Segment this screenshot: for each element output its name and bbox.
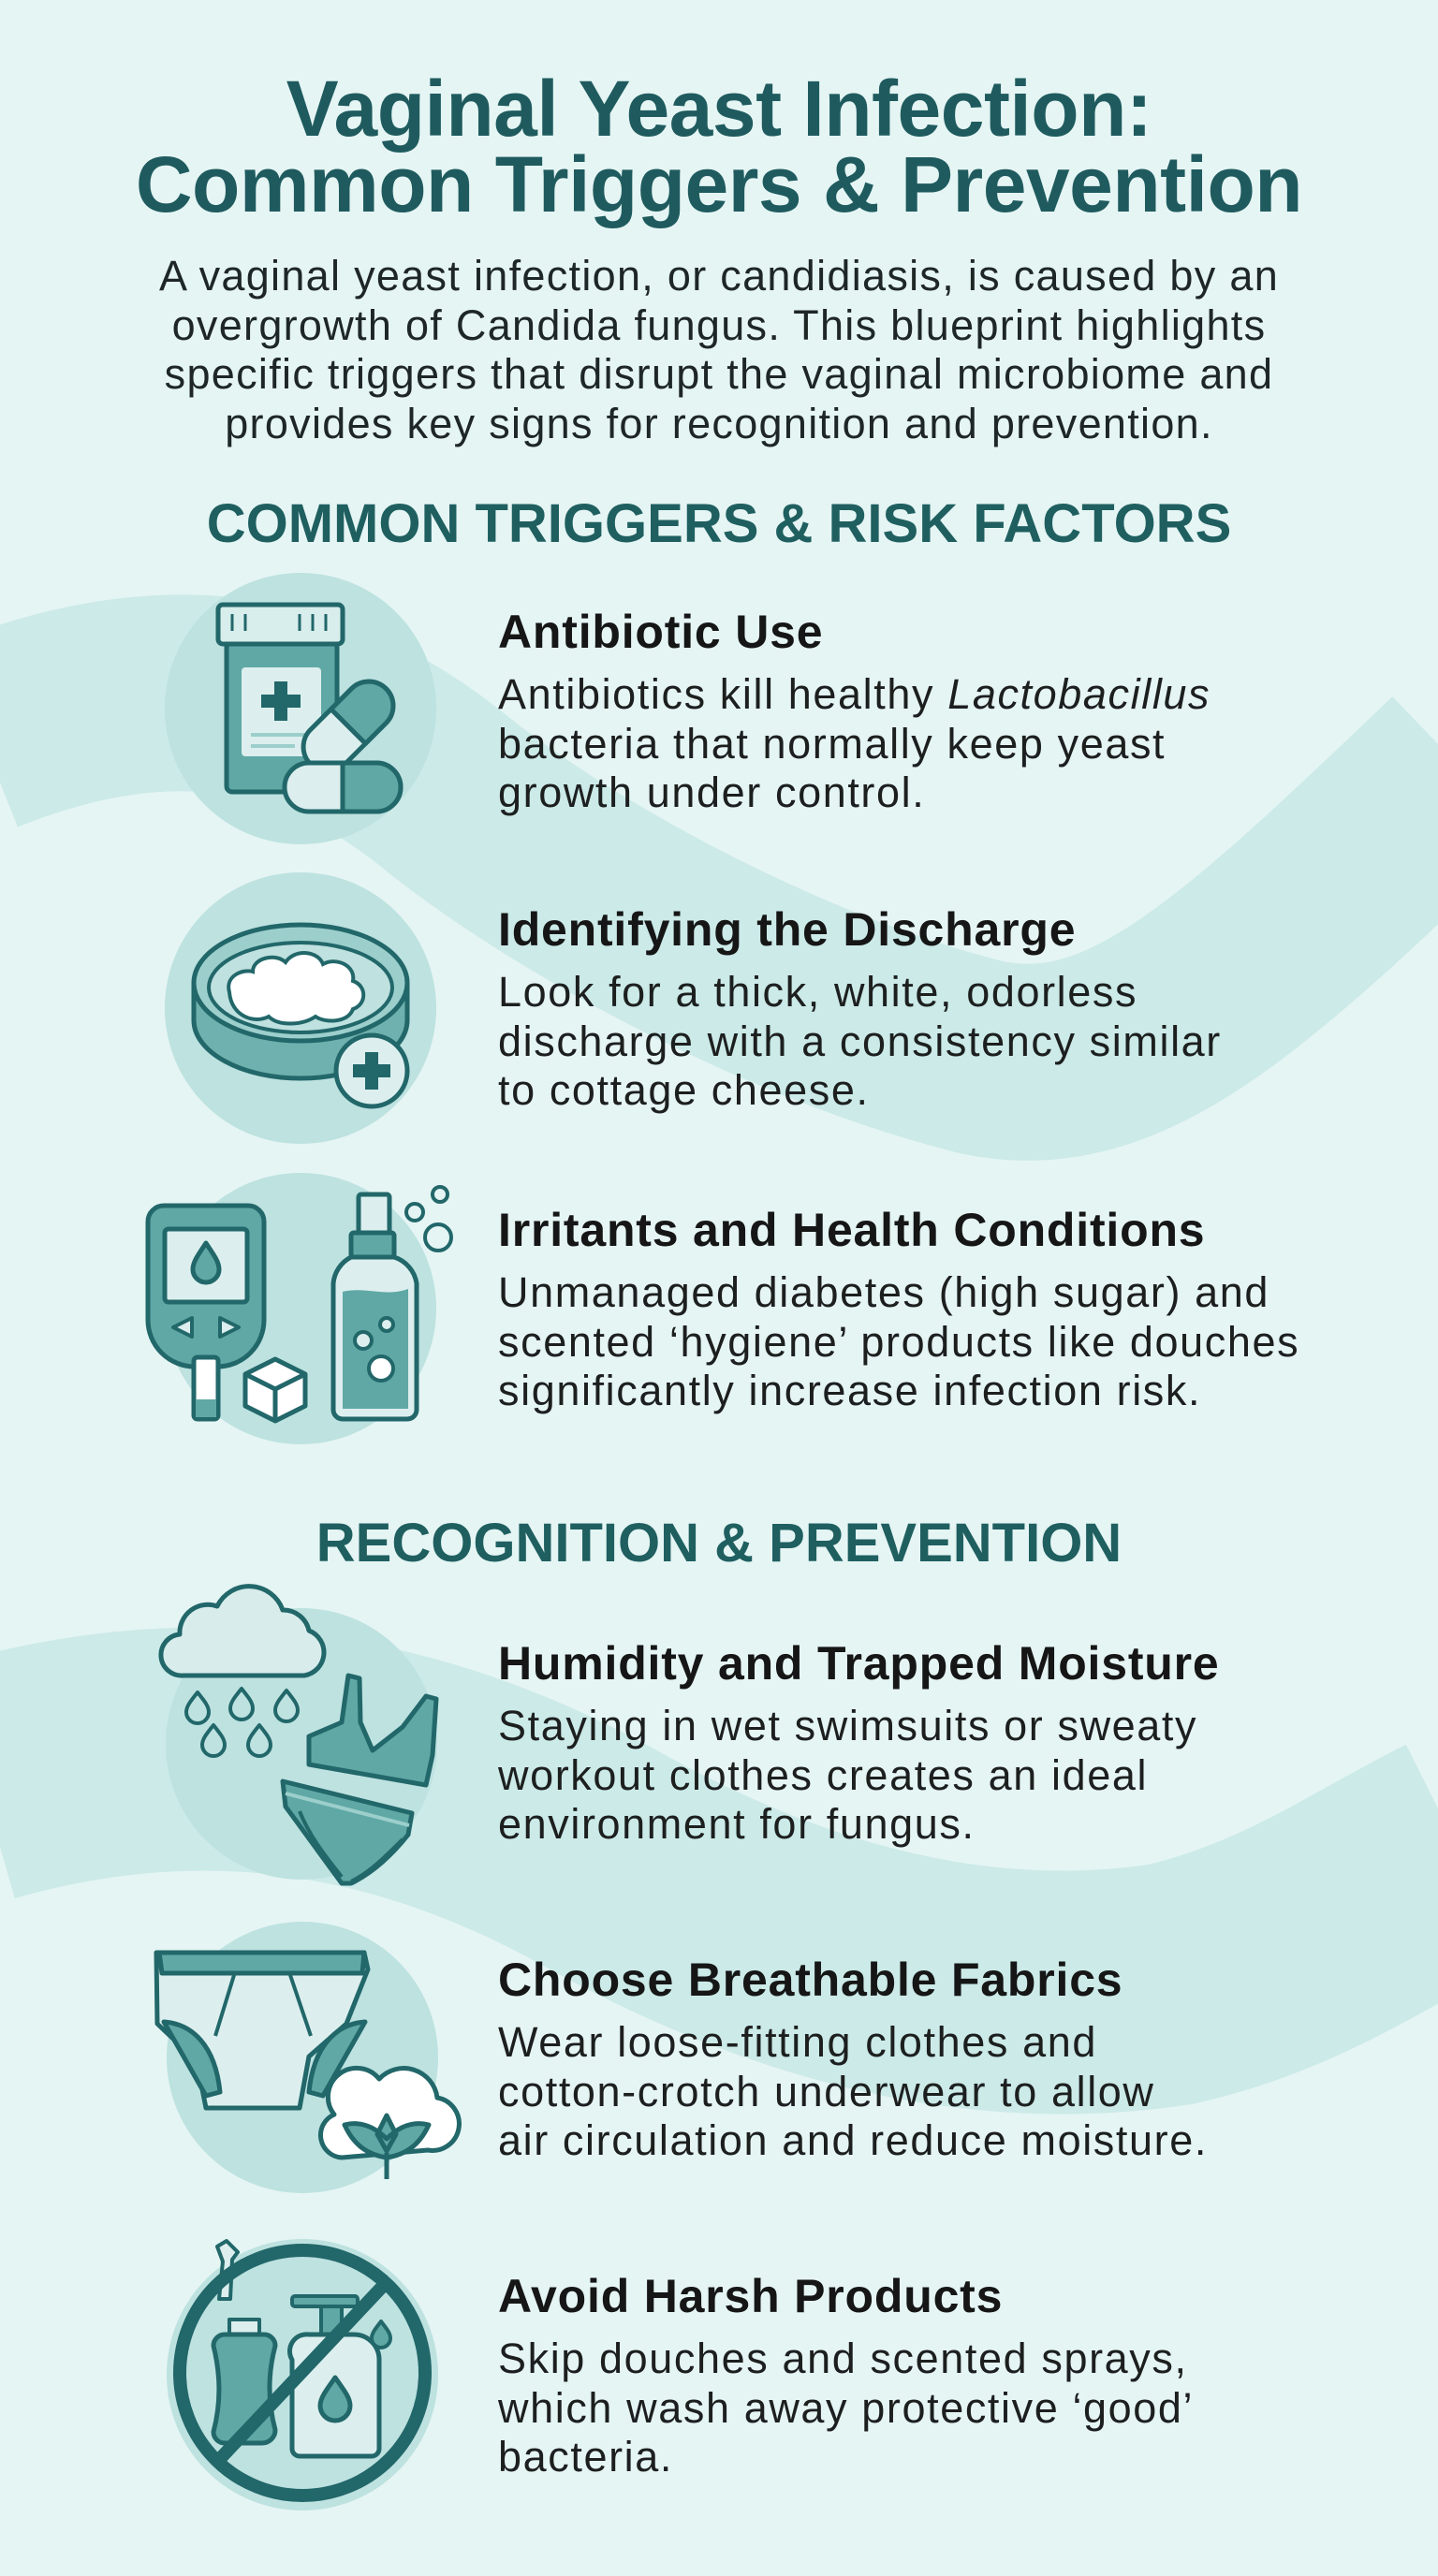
title: Vaginal Yeast Infection: — [286, 65, 1152, 153]
item: identifying the discharge: Identifying the Discharge — [498, 903, 1076, 956]
item: breathable fabrics — [498, 1954, 1208, 2164]
section heading: prevention: RECOGNITION & PREVENTION — [316, 1513, 1122, 1573]
item: antibiotic use — [498, 606, 1211, 816]
item: irritants: Unmanaged diabetes (high sugar) and — [498, 1268, 1269, 1316]
intro text: A vaginal yeast infection, or candidiasis, is caused by an — [159, 252, 1279, 300]
item: humidity: workout clothes creates an ideal — [498, 1750, 1148, 1799]
item: avoid harsh products: Skip douches and scented sprays, — [498, 2334, 1188, 2382]
icon: breathable briefs and cotton — [154, 1951, 462, 2179]
item: humidity — [498, 1637, 1219, 1848]
icon: no douches / harsh products — [173, 2239, 432, 2502]
item: avoid harsh products: bacteria. — [498, 2433, 673, 2481]
item: humidity: environment for fungus. — [498, 1800, 976, 1848]
item: irritants: significantly increase infection risk. — [498, 1367, 1201, 1414]
item: humidity: Staying in wet swimsuits or sweaty — [498, 1702, 1197, 1749]
item: antibiotic use: growth under control. — [498, 768, 925, 816]
item: avoid harsh products: which wash away protective ‘good’ — [498, 2383, 1194, 2432]
title: Common Triggers & Prevention — [136, 140, 1302, 228]
item: humidity: Humidity and Trapped Moisture — [498, 1637, 1219, 1690]
intro text — [159, 252, 1279, 447]
item: identifying the discharge: Look for a thick, white, odorless — [498, 968, 1137, 1016]
item: irritants — [498, 1204, 1299, 1414]
item: avoid harsh products — [498, 2270, 1194, 2481]
icon: petri dish with discharge — [191, 923, 410, 1108]
item: breathable fabrics: Choose Breathable Fabrics — [498, 1954, 1123, 2006]
icon: rain cloud and wet swimsuit — [158, 1584, 438, 1885]
item: irritants: scented ‘hygiene’ products like douches — [498, 1318, 1299, 1365]
icon: glucose meter, sugar cube, spray bottle — [146, 1185, 453, 1423]
item: identifying the discharge — [498, 903, 1222, 1114]
intro text: overgrowth of Candida fungus. This blueprint highlights — [172, 301, 1266, 349]
item: antibiotic use: Antibiotics kill healthy Lactobacillus — [498, 670, 1211, 718]
intro text: provides key signs for recognition and prevention. — [225, 400, 1213, 447]
item: antibiotic use: Antibiotic Use — [498, 606, 823, 658]
item: avoid harsh products: Avoid Harsh Products — [498, 2270, 1003, 2322]
item: irritants: Irritants and Health Conditions — [498, 1204, 1205, 1256]
item: breathable fabrics: cotton-crotch underwear to allow — [498, 2067, 1155, 2115]
item: identifying the discharge: discharge with a consistency similar — [498, 1017, 1222, 1065]
item: identifying the discharge: to cottage cheese. — [498, 1066, 870, 1114]
item: antibiotic use: bacteria that normally keep yeast — [498, 719, 1166, 768]
item: breathable fabrics: air circulation and reduce moisture. — [498, 2116, 1208, 2164]
item: breathable fabrics: Wear loose-fitting clothes and — [498, 2018, 1097, 2066]
section heading: triggers: COMMON TRIGGERS & RISK FACTORS — [207, 493, 1231, 554]
icon: pill bottle with capsules — [215, 603, 403, 814]
intro text: specific triggers that disrupt the vaginal microbiome and — [165, 350, 1273, 398]
title — [136, 65, 1302, 228]
